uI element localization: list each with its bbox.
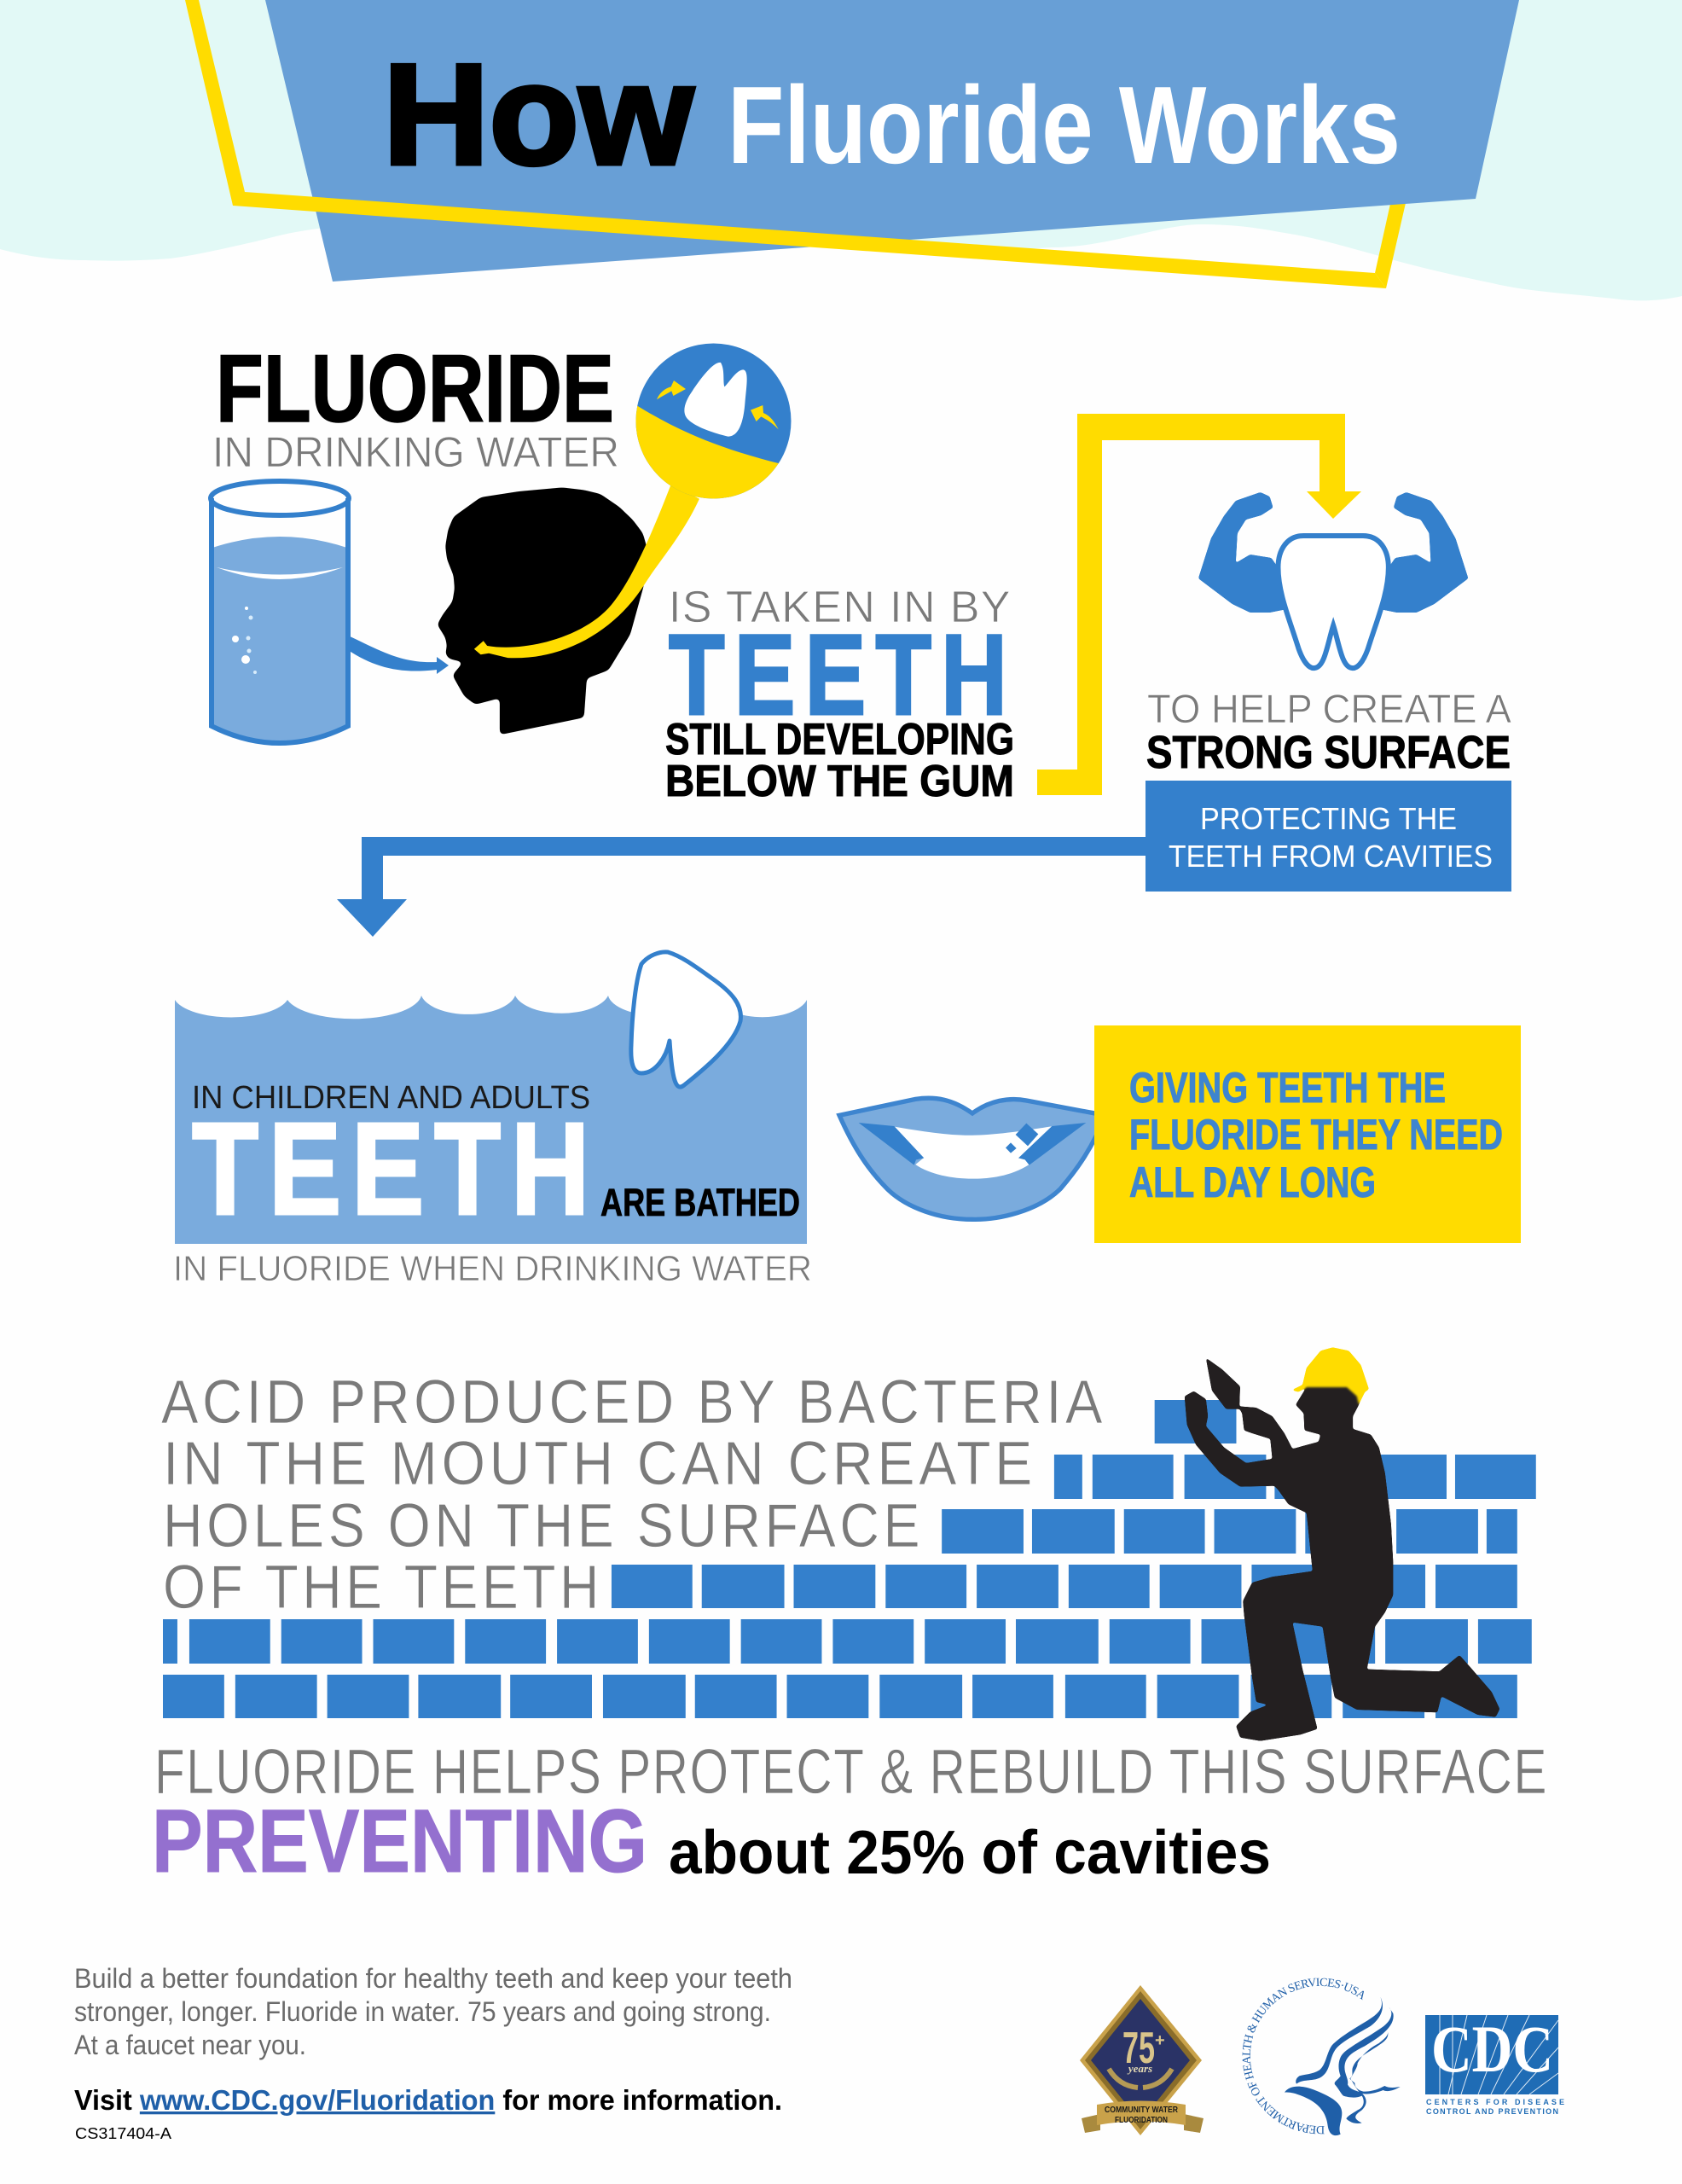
chart: brick wall [163, 1400, 1536, 1718]
text: to help create a strong surface [1146, 686, 1512, 778]
text: to help create a strong surface: TO HELP CREATE A [1147, 686, 1512, 731]
logo: 75 years badge: + [1155, 2031, 1165, 2050]
text: in fluoride when drinking water: IN FLUORIDE WHEN DRINKING WATER [173, 1248, 812, 1288]
panel: protecting the teeth [1146, 781, 1511, 892]
footer text: Build a better foundation for healthy teeth and keep your teeth [74, 1963, 792, 1994]
panel: giving teeth fluoride: ALL DAY LONG [1129, 1159, 1376, 1206]
text: to help create a strong surface: STRONG SURFACE [1146, 727, 1511, 778]
text: is taken in by teeth: BELOW THE GUM [665, 757, 1014, 806]
arrow: blue [337, 837, 1146, 937]
heading: fluoride in drinking water: IN DRINKING WATER [212, 428, 619, 476]
text: acid produced by bacteria: ACID PRODUCED BY BACTERIA [161, 1368, 1106, 1437]
text: preventing about 25% of cavities: about 25% of cavities [669, 1819, 1271, 1887]
footer text: At a faucet near you. [74, 2030, 306, 2060]
icon: glass of water [210, 481, 350, 743]
text: acid produced by bacteria: IN THE MOUTH CAN CREATE [163, 1430, 1036, 1498]
logo: 75 years badge: FLUORIDATION [1115, 2116, 1168, 2125]
title: How [383, 34, 693, 195]
background wave [0, 0, 1682, 300]
text: is taken in by teeth: IS TAKEN IN BY [669, 583, 1012, 632]
logo: CDC: CONTROL AND PREVENTION [1426, 2107, 1558, 2116]
title banner [185, 0, 1519, 288]
icon: smile [839, 1098, 1105, 1219]
footer text: stronger, longer. Fluoride in water. 75 years and going strong. [74, 1996, 771, 2027]
icon: construction worker [1185, 1347, 1499, 1741]
text: is taken in by teeth: STILL DEVELOPING [665, 715, 1014, 764]
text: acid produced by bacteria: HOLES ON THE SURFACE [163, 1492, 924, 1560]
panel: giving teeth fluoride: FLUORIDE THEY NEED [1129, 1111, 1503, 1159]
icon: tooth in water [631, 952, 740, 1087]
text: acid produced by bacteria [161, 1368, 1106, 1622]
logo: CDC: CDC [1431, 2012, 1553, 2086]
text: is taken in by teeth: TEETH [669, 612, 1017, 739]
panel: water with teeth text: ARE BATHED [600, 1181, 800, 1224]
title: Fluoride Works [728, 64, 1401, 187]
panel: water with teeth text [175, 996, 807, 1244]
logo: 75 years badge [1080, 1985, 1204, 2135]
panel: water with teeth text: IN CHILDREN AND ADULTS [192, 1080, 590, 1116]
icon: tooth in circle with yellow tail [474, 343, 793, 658]
logo: HHS seal: DEPARTMENT OF HEALTH & HUMAN SERVICES·USA [1242, 1978, 1364, 2135]
logo: 75 years badge: COMMUNITY WATER [1105, 2106, 1179, 2115]
title [383, 34, 1401, 195]
icon: head silhouette [438, 487, 647, 735]
logo: 75 years badge: years [1127, 2062, 1152, 2075]
footer text: Visit www.CDC.gov/Fluoridation for more information. [74, 2084, 782, 2116]
text: preventing about 25% of cavities: PREVENTING [152, 1792, 647, 1891]
heading: fluoride in drinking water: FLUORIDE [216, 335, 614, 442]
icon: strong tooth with arms [1198, 492, 1468, 668]
arrow: yellow [1037, 414, 1361, 795]
panel: protecting the teeth: TEETH FROM CAVITIES [1169, 839, 1493, 874]
logo: CDC [1425, 2012, 1564, 2116]
text: preventing about 25% of cavities [152, 1792, 1271, 1891]
footer text: CS317404-A [75, 2125, 171, 2142]
heading: fluoride in drinking water [212, 335, 619, 476]
panel: protecting the teeth: PROTECTING THE [1200, 801, 1457, 836]
panel: giving teeth fluoride [1094, 1025, 1521, 1243]
arrow: glass to mouth [348, 636, 449, 674]
logo: 75 years badge: 75 [1122, 2024, 1155, 2073]
text: is taken in by teeth [665, 583, 1017, 806]
logo: CDC: CENTERS FOR DISEASE [1426, 2098, 1564, 2106]
panel: giving teeth fluoride: GIVING TEETH THE [1129, 1064, 1446, 1112]
panel: water with teeth text: TEETH [192, 1095, 600, 1242]
text: acid produced by bacteria: OF THE TEETH [163, 1554, 603, 1622]
footer text [74, 1963, 792, 2142]
